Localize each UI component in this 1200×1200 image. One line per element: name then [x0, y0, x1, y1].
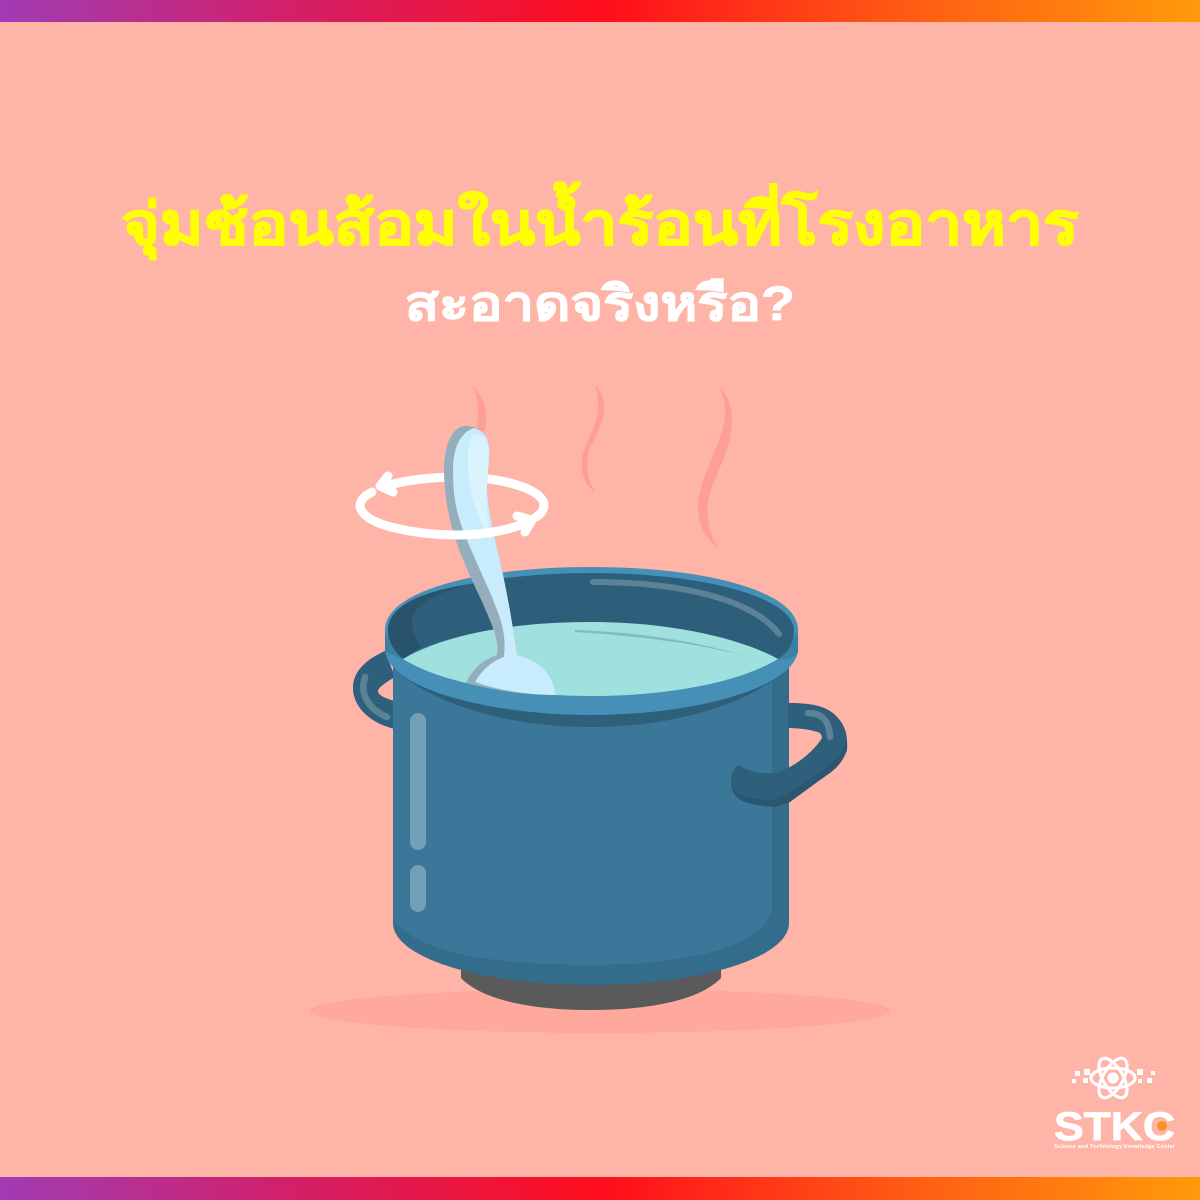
right handle — [731, 703, 847, 807]
pot foot — [461, 960, 721, 1010]
rim outer — [385, 567, 798, 715]
logo wordmark: STKC — [1054, 1105, 1175, 1149]
interior shadow — [388, 584, 470, 659]
body highlights — [410, 713, 426, 912]
logo: STKC — [1054, 1056, 1176, 1150]
top gradient bar — [0, 0, 1200, 22]
logo tagline: Science and Technology Knowledge Center — [1054, 1144, 1176, 1150]
rim side shading — [385, 632, 798, 659]
ground shadow — [310, 989, 890, 1033]
water ripple — [575, 630, 745, 656]
logo atom mark — [1091, 1054, 1135, 1102]
left handle — [353, 651, 395, 729]
rotation arrow: back arc — [380, 476, 544, 517]
bottom gradient bar — [0, 1177, 1200, 1200]
pot interior — [388, 573, 794, 659]
subtitle: สะอาดจริงหรือ? — [405, 278, 795, 331]
steam wisps — [472, 385, 732, 548]
rotation arrow: front arc — [360, 492, 532, 535]
water — [403, 622, 778, 696]
inner rim glint — [593, 582, 779, 634]
logo dot — [1157, 1121, 1167, 1131]
spoon — [444, 426, 556, 695]
pot rim under-shadow — [393, 668, 789, 727]
logo pixel squares — [1072, 1069, 1155, 1083]
title: จุ่มช้อนส้อมในน้ำร้อนที่โรงอาหาร — [121, 192, 1079, 257]
pot body — [393, 660, 789, 985]
